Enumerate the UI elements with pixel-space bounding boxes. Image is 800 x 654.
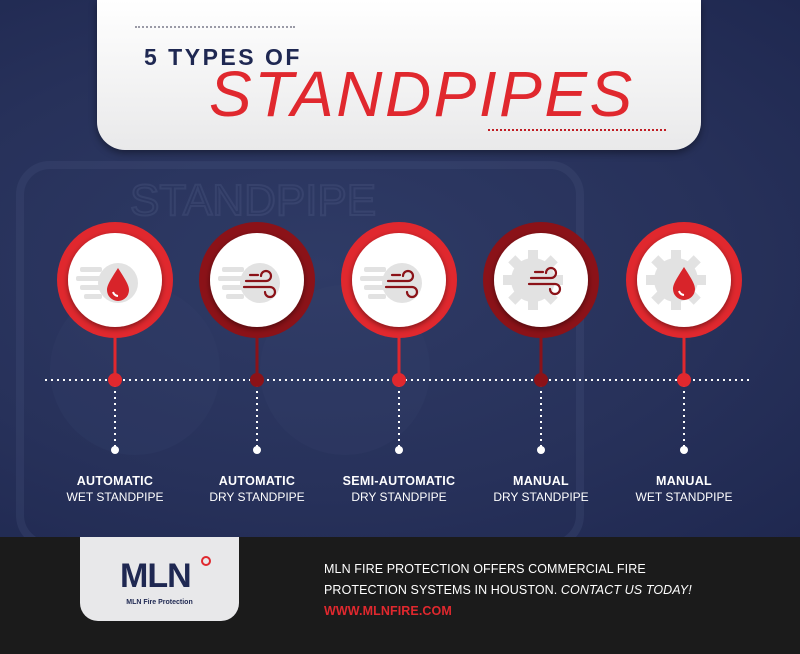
footer text (324, 562, 692, 618)
footer text: WWW.MLNFIRE.COM (324, 604, 452, 618)
label 2: DRY STANDPIPE (209, 490, 305, 504)
background: STANDPIPE (130, 176, 376, 225)
label 1: WET STANDPIPE (67, 490, 163, 504)
item 4 (483, 222, 599, 454)
item 3 (341, 222, 457, 454)
label 4: DRY STANDPIPE (493, 490, 589, 504)
label 2 (209, 474, 305, 504)
logo card (80, 537, 239, 621)
label 3 (343, 474, 455, 504)
label 1 (66, 474, 163, 504)
title card (97, 0, 701, 150)
label 2: AUTOMATIC (219, 474, 295, 488)
label 3: DRY STANDPIPE (351, 490, 447, 504)
footer text: MLN FIRE PROTECTION OFFERS COMMERCIAL FIRE (324, 562, 646, 576)
label 3: SEMI-AUTOMATIC (343, 474, 455, 488)
label 5: WET STANDPIPE (636, 490, 732, 504)
label 5: MANUAL (656, 474, 712, 488)
logo card: MLN Fire Protection (126, 599, 193, 606)
item 1 (57, 222, 173, 454)
label 5 (636, 474, 732, 504)
label 4: MANUAL (513, 474, 569, 488)
label 4 (493, 474, 589, 504)
footer (0, 537, 800, 654)
item 5 (626, 222, 742, 454)
footer text: PROTECTION SYSTEMS IN HOUSTON. CONTACT US TODAY! (324, 583, 692, 597)
heading: 5 types of: 5 TYPES OF (144, 44, 302, 70)
label 1: AUTOMATIC (77, 474, 153, 488)
item 2 (199, 222, 315, 454)
logo card: MLN (120, 557, 191, 595)
heading: standpipes: STANDPIPES (209, 58, 635, 130)
